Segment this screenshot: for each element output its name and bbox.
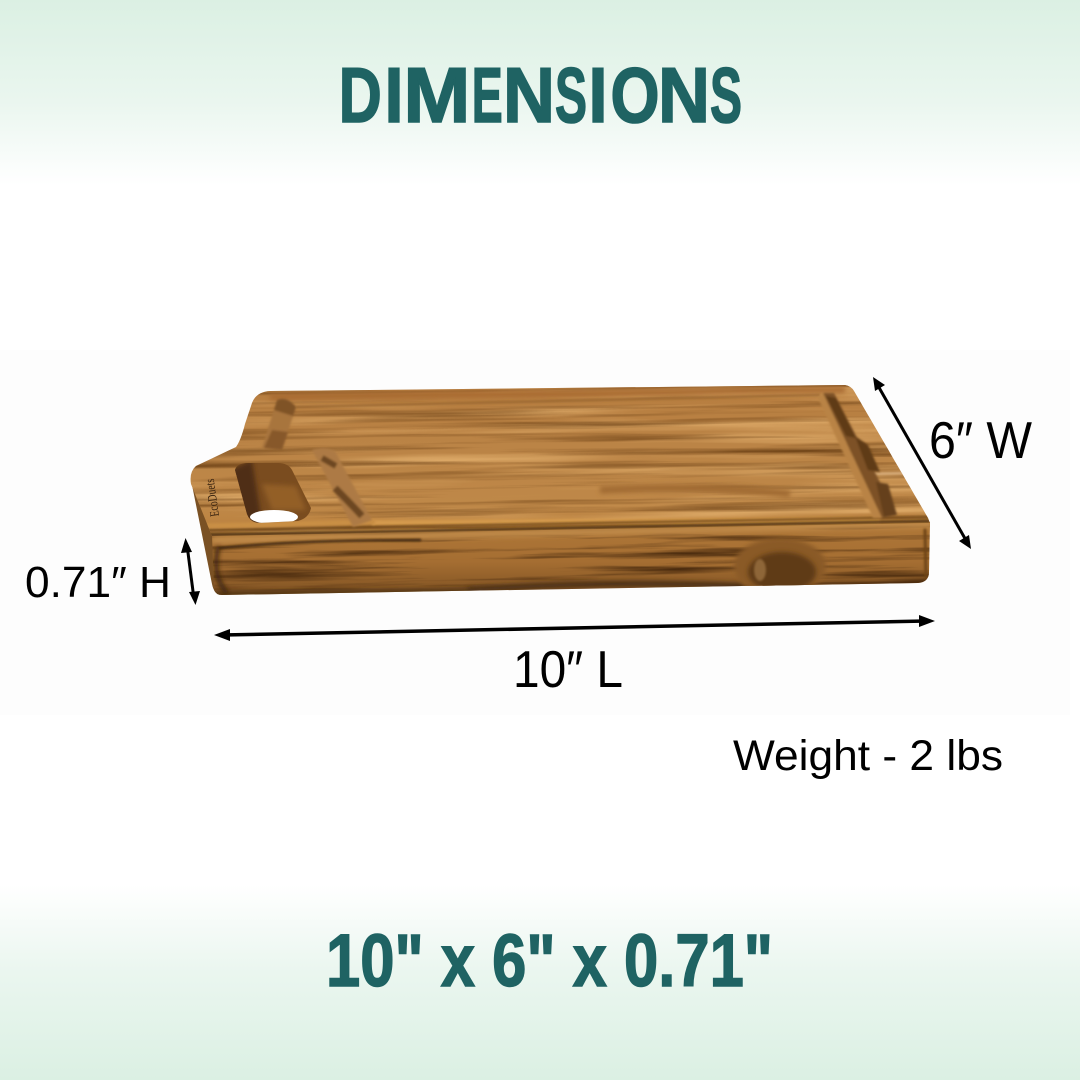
title: I — [588, 51, 608, 139]
title: I — [384, 51, 404, 139]
handle slot hole — [235, 463, 311, 523]
title: S — [710, 51, 742, 139]
label: width: 6″ W — [929, 412, 1032, 470]
title: N — [503, 51, 555, 139]
wood knot — [733, 537, 826, 586]
title: S — [555, 51, 587, 139]
groove: right side — [818, 393, 897, 518]
board left side — [191, 480, 220, 594]
arrow: length — [214, 615, 935, 641]
title: O — [610, 51, 660, 139]
title: M — [403, 51, 470, 139]
label: height: 0.71″ H — [25, 558, 171, 607]
label: length: 10″ L — [513, 641, 623, 699]
board top face — [190, 385, 930, 536]
title: N — [658, 51, 710, 139]
burned-in logo: EcoDuets — [202, 478, 222, 518]
arrow: height — [181, 538, 200, 605]
title: D — [339, 51, 382, 139]
title: E — [472, 51, 503, 139]
board front edge — [212, 522, 930, 595]
cutting board product — [190, 385, 930, 595]
summary dimensions: 10" x 6" x 0.71" — [326, 919, 773, 1002]
label: weight: Weight - 2 lbs — [733, 732, 1003, 780]
groove: handle inner — [312, 448, 372, 527]
arrow: width — [873, 377, 971, 549]
groove: upper left — [262, 399, 296, 450]
